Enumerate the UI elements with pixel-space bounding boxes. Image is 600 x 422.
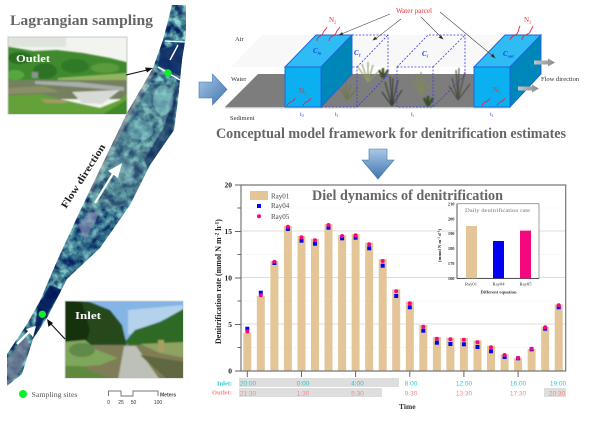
axes and frame [241, 185, 566, 371]
inset chart: daily denitrification rate: Ray05 [520, 282, 532, 286]
layer labels: Water [231, 76, 247, 83]
y axis values: 0 [228, 366, 232, 376]
outflow arrows [534, 58, 555, 66]
inset chart: daily denitrification rate: -1 [436, 230, 440, 233]
y axis title: Denitrification rate (mmol N m [214, 237, 223, 344]
time labels: t [490, 112, 492, 118]
chart legend: Ray04 [271, 202, 290, 210]
inset chart: daily denitrification rate: 170 [448, 261, 455, 266]
time axis: outlet row [212, 388, 566, 398]
inset chart: daily denitrification rate: (mmol N m [437, 240, 442, 262]
concentration labels: C [422, 50, 427, 58]
time axis: outlet row: 5:30 [351, 390, 364, 398]
legend: sampling sites [19, 390, 78, 399]
time axis: outlet row: 21:30 [240, 390, 257, 398]
chart legend: Ray01 [271, 192, 290, 200]
y axis values: 10 [224, 274, 232, 282]
markers: Ray05 [245, 223, 561, 360]
y axis values [224, 180, 232, 376]
layer labels: Sediment [230, 115, 255, 122]
concentration labels: 1 [359, 52, 361, 58]
concentration labels: out [508, 54, 514, 58]
bars: Ray01 [243, 224, 563, 370]
arrow: outlet photo to site [126, 68, 153, 75]
time axis: inlet row: 16:00 [510, 380, 527, 388]
N2 labels: N [299, 87, 304, 95]
concentration labels: C [313, 47, 318, 55]
scale bar: Meters [160, 392, 176, 398]
heading: conceptual model: Conceptual model framework for denitrification estimates [216, 126, 566, 142]
N2 labels: 2 [498, 90, 500, 94]
layer labels: Flow direction [541, 76, 580, 83]
arrow: inlet photo to site [47, 319, 65, 339]
time axis: inlet row: 19:00 [550, 380, 567, 388]
concentration labels [313, 47, 514, 58]
N2 flux arrows [287, 26, 533, 106]
time axis: inlet row: Inlet: [217, 380, 232, 388]
layer labels: Air [235, 36, 244, 43]
time axis: outlet row: 17:30 [510, 390, 527, 398]
y axis title: -1 [214, 221, 220, 226]
chart legend [250, 191, 290, 221]
photo: outlet [5, 35, 130, 116]
arrow: model to chart [362, 149, 394, 179]
y axis title: ) [214, 219, 223, 222]
water parcel label: Water parcel [396, 8, 432, 15]
inset chart: daily denitrification rate: Ray04 [492, 282, 505, 286]
N2 labels [299, 16, 531, 96]
panel: river map [7, 5, 186, 386]
concentration labels: C [503, 50, 508, 58]
concentration labels: C [354, 49, 359, 57]
y axis title: -2 [214, 233, 220, 237]
N2 labels: N [329, 16, 334, 24]
river tones [8, 42, 186, 384]
weir lines and flow arrows [17, 41, 186, 344]
N2 labels: 2 [529, 20, 531, 24]
chart legend: Ray05 [271, 213, 290, 221]
y axis values: 20 [224, 180, 232, 190]
scale bar: 0 [107, 400, 110, 406]
scale bar: 25 [118, 400, 124, 406]
photo label: Inlet: Inlet [75, 310, 101, 322]
markers: Ray04 [245, 226, 561, 360]
time axis: inlet row: 12:00 [456, 380, 473, 388]
time axis: outlet row: 1:30 [297, 390, 310, 398]
dashed parcel C1 [321, 35, 388, 107]
label: flow direction: Flow direction [59, 142, 109, 211]
time axis: inlet row: 0:00 [297, 380, 310, 388]
inset chart: daily denitrification rate: Ray01 [465, 282, 478, 286]
chart: diel dynamics of denitrification [214, 180, 566, 377]
gridlines [241, 208, 566, 348]
inset chart: daily denitrification rate: 190 [448, 231, 455, 236]
y axis title: h [214, 226, 223, 233]
inset chart: daily denitrification rate: 200 [448, 216, 455, 222]
N2 labels: N [524, 16, 529, 24]
time labels: i [413, 113, 415, 118]
water plane [225, 74, 510, 107]
site marker: outlet [164, 69, 172, 77]
time labels: f [492, 113, 494, 118]
panel: conceptual model diagram [225, 8, 580, 122]
inset chart: daily denitrification rate: 160 [448, 276, 455, 281]
scale bar: 50 [131, 400, 136, 406]
inset chart: daily denitrification rate: d [437, 233, 442, 237]
inset chart: daily denitrification rate: 210 [448, 202, 455, 206]
water parcel leader lines [339, 12, 495, 58]
time axis: outlet row: 9:30 [405, 390, 418, 398]
chart title: Diel dynamics of denitrification [312, 188, 503, 204]
photo: inlet [63, 299, 185, 380]
inset chart: daily denitrification rate: Daily denitrification rate [465, 207, 531, 214]
arrow: map to model [199, 74, 227, 105]
y axis values: 5 [228, 320, 232, 329]
x axis title: Time [399, 402, 416, 411]
time axis: inlet row: 8:00 [405, 380, 418, 388]
time axis: inlet row [217, 378, 567, 388]
air plane [231, 35, 541, 67]
river base [7, 5, 186, 386]
N2 labels: 2 [334, 20, 336, 24]
N2 labels: N [493, 86, 498, 94]
y axis values: 15 [224, 227, 232, 236]
layer labels [230, 36, 580, 122]
inflow box [285, 35, 352, 107]
inset chart: daily denitrification rate: ) [437, 228, 442, 230]
time labels: t [411, 112, 413, 118]
inset chart: daily denitrification rate [436, 202, 539, 294]
photo label: Outlet: Outlet [16, 53, 50, 65]
y axis ticks [235, 185, 518, 377]
time axis: outlet row: 13:30 [456, 390, 473, 398]
scale bar: 100 [154, 400, 162, 406]
plants [338, 62, 470, 106]
time axis: inlet row: 4:00 [351, 380, 364, 388]
heading: Lagrangian sampling: Lagrangian sampling [10, 13, 154, 29]
site marker: inlet [39, 311, 46, 318]
dashed parcel Ci [397, 35, 465, 107]
time labels [300, 112, 494, 118]
inset chart: daily denitrification rate: -2 [436, 237, 440, 240]
inset chart: daily denitrification rate: Different equation [480, 290, 517, 294]
time axis: outlet row: 20:30 [549, 390, 566, 398]
time labels: t [335, 112, 337, 118]
concentration labels: in [318, 50, 322, 56]
time labels: t [300, 112, 302, 118]
time axis: inlet row: 20:00 [240, 380, 257, 388]
scale bar [107, 391, 176, 406]
legend: sampling sites: Sampling sites [32, 391, 78, 399]
time axis: outlet row: Outlet: [212, 390, 232, 396]
sediment line [225, 107, 510, 108]
inset chart: daily denitrification rate: 180 [448, 246, 455, 251]
N2 labels: 2 [304, 90, 306, 96]
time labels: 1 [337, 113, 339, 118]
concentration labels: i [427, 54, 429, 58]
outflow box [474, 35, 541, 107]
time labels: 0 [302, 113, 304, 118]
outflow arrow lower [518, 84, 539, 92]
